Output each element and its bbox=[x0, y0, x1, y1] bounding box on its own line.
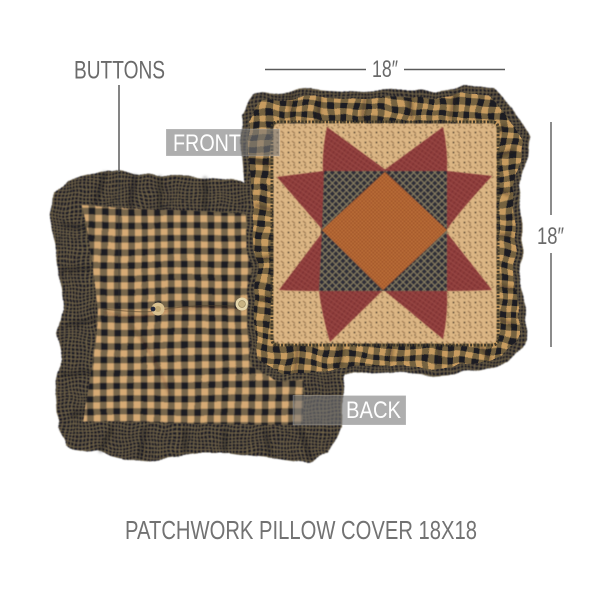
buttons label: BUTTONS bbox=[74, 56, 165, 84]
front label text: FRONT bbox=[173, 130, 241, 157]
right button bbox=[236, 298, 248, 310]
front ruffle gathers bbox=[255, 95, 515, 372]
back ruffle gathers bbox=[60, 172, 310, 458]
front label box bbox=[166, 129, 280, 156]
buttons leader line bbox=[118, 85, 120, 306]
front label bbox=[166, 129, 280, 157]
star backing bbox=[319, 170, 447, 291]
navy triangles bbox=[319, 171, 447, 291]
width value: 18″ bbox=[372, 56, 398, 83]
star block bbox=[277, 127, 492, 342]
back label box bbox=[293, 396, 406, 425]
height line top bbox=[550, 122, 552, 215]
back label text: BACK bbox=[346, 397, 401, 424]
center diamond bbox=[322, 172, 447, 290]
back label bbox=[293, 396, 406, 425]
back pillow bbox=[50, 170, 345, 463]
back panel folds bbox=[103, 308, 245, 395]
panel seam bbox=[272, 122, 498, 345]
star points bbox=[277, 127, 492, 342]
front gingham ruffle bbox=[249, 94, 523, 375]
height value: 18″ bbox=[537, 223, 564, 250]
width line right bbox=[404, 68, 505, 70]
title: PATCHWORK PILLOW COVER 18X18 bbox=[125, 515, 477, 545]
button flap fold bbox=[103, 306, 245, 312]
front outer ruffle edge bbox=[242, 87, 530, 382]
front pillow bbox=[242, 87, 530, 382]
back gingham panel bbox=[80, 205, 303, 425]
left button bbox=[151, 302, 164, 316]
height line bottom bbox=[550, 253, 552, 347]
patchwork background bbox=[274, 124, 496, 344]
width line left bbox=[265, 68, 366, 70]
back ruffle bbox=[50, 170, 345, 463]
